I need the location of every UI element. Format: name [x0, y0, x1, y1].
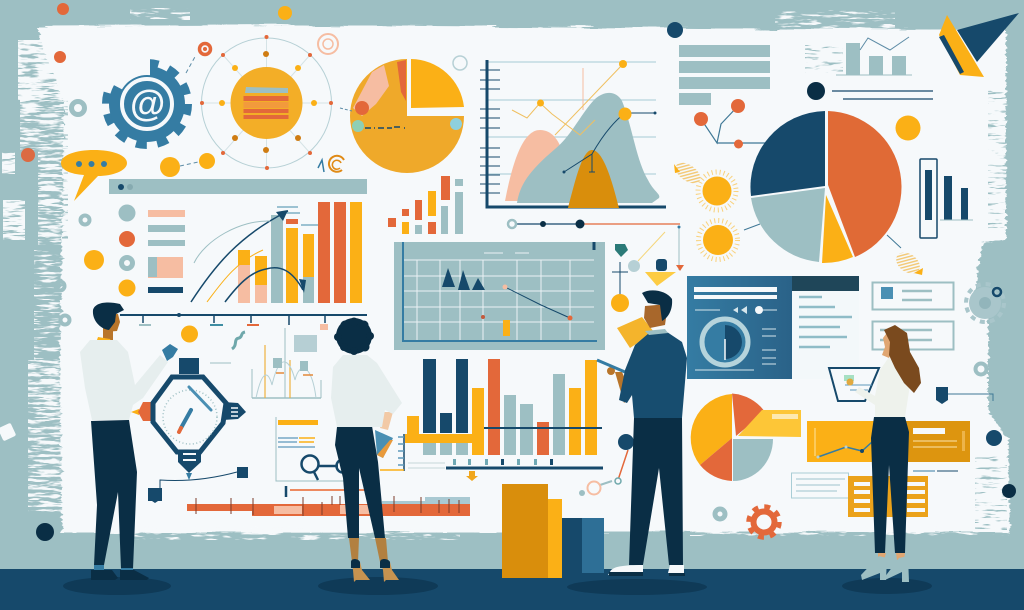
- node network: [694, 99, 765, 148]
- connected yellow dots: [160, 153, 215, 177]
- dashboard panel: [687, 276, 859, 379]
- document chart with magnifier: [276, 417, 350, 481]
- table panel: [848, 476, 928, 517]
- orange timeline bar: [187, 486, 470, 516]
- grid panel: [394, 242, 605, 350]
- timeline line: [508, 220, 680, 270]
- spike chart: [252, 328, 321, 398]
- ruler timeline: [120, 313, 367, 363]
- hub diagram: [200, 35, 333, 170]
- small combo chart: [836, 37, 912, 75]
- icon: orange gear: [748, 506, 780, 538]
- icon: target: [186, 44, 210, 73]
- small figures and tokens: [611, 232, 684, 312]
- person: man with blue sweater: [567, 290, 707, 595]
- text block bars: [679, 45, 770, 105]
- bar chart: navy thermometer: [920, 159, 973, 238]
- icon: gear with at sign: @: [129, 83, 165, 124]
- bubbles with connector: [148, 467, 248, 503]
- legend list: [84, 204, 185, 296]
- pie chart: lower: [691, 394, 801, 481]
- pie chart: large: [744, 111, 902, 263]
- pie chart: map pie: [340, 56, 468, 173]
- icon: hatched shapes: [672, 158, 924, 278]
- small bar chart: [388, 176, 463, 234]
- bar chart: central: [380, 359, 603, 481]
- person: woman with long hair: [829, 325, 932, 594]
- icon: gray gears: [966, 284, 1004, 322]
- icon: gear with at sign: [100, 55, 188, 145]
- block columns: [502, 484, 604, 578]
- icon: chain links: [579, 434, 634, 496]
- floor: [0, 569, 1024, 610]
- gauge: [131, 358, 246, 480]
- icon: suns: [698, 172, 738, 260]
- speech bubble: [61, 150, 127, 201]
- icon: tag with line: [936, 387, 993, 404]
- area and line chart: [480, 60, 666, 208]
- arrow: paper plane: [939, 13, 1019, 77]
- bar chart with arrows: [191, 202, 362, 303]
- header bar: [109, 179, 367, 194]
- gold line chart panel: [807, 421, 970, 471]
- person: woman with curly hair: [318, 318, 438, 595]
- info cards: [872, 282, 954, 350]
- icon: swirls: [318, 34, 467, 172]
- note box: [792, 473, 848, 498]
- legend lines: [807, 82, 933, 140]
- person: man with white shirt: [63, 302, 178, 595]
